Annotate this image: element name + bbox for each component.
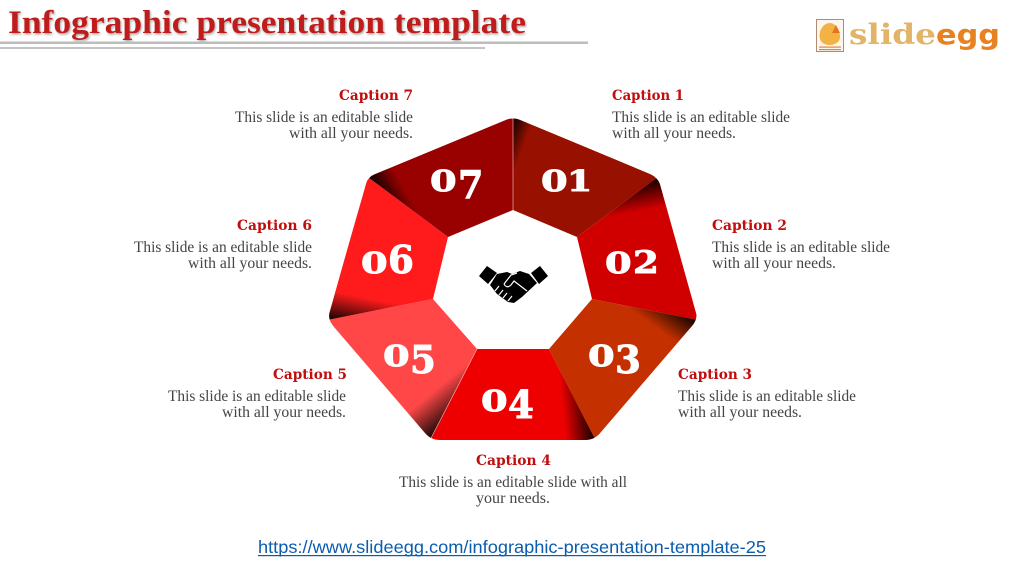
- number 03: 3: [615, 338, 641, 382]
- caption 2: This slide is an editable slide: [712, 239, 890, 256]
- caption 5: [168, 367, 347, 421]
- caption 4: Caption 4: [476, 453, 551, 469]
- caption 6: with all your needs.: [188, 255, 312, 272]
- title: Infographic presentation template: [8, 5, 526, 41]
- number 04: [481, 383, 534, 427]
- caption 3: [678, 367, 856, 421]
- caption 7: with all your needs.: [289, 125, 413, 142]
- number 06: 6: [388, 238, 414, 282]
- caption 3: with all your needs.: [678, 404, 802, 421]
- icon: egg logo mark: [816, 20, 844, 52]
- number 06: [361, 238, 414, 282]
- caption 4: [399, 453, 628, 507]
- segment 05: [327, 299, 477, 441]
- number 07: [430, 162, 483, 207]
- caption 1: with all your needs.: [612, 125, 736, 142]
- heptagon diagram: [327, 117, 698, 441]
- logo: slideegg: egg: [936, 18, 1000, 51]
- caption 4: your needs.: [476, 490, 550, 507]
- logo: slideegg: [816, 18, 1000, 52]
- caption 2: with all your needs.: [712, 255, 836, 272]
- segment 03: [549, 299, 698, 441]
- caption 4: This slide is an editable slide with all: [399, 474, 628, 491]
- caption 2: Caption 2: [712, 218, 787, 234]
- number 01: [541, 164, 592, 199]
- segment 06: [327, 177, 448, 320]
- caption 1: This slide is an editable slide: [612, 109, 790, 126]
- number 03: 0: [588, 340, 615, 374]
- logo: slideegg: slide: [849, 18, 936, 51]
- caption 6: [134, 218, 312, 272]
- number 04: 0: [481, 385, 508, 419]
- number 03: [588, 338, 641, 382]
- segment 02: [577, 177, 698, 320]
- caption 6: Caption 6: [237, 218, 312, 234]
- number 05: 0: [383, 340, 410, 374]
- caption 7: This slide is an editable slide: [235, 109, 413, 126]
- number 04: 4: [508, 383, 534, 427]
- segment 04: [430, 349, 596, 441]
- number 01: 1: [567, 164, 592, 198]
- caption 2: [712, 218, 890, 272]
- number 05: 5: [410, 338, 436, 382]
- icon: handshake: [479, 266, 548, 303]
- number 02: [605, 245, 659, 281]
- number 02: 0: [605, 247, 632, 281]
- segment 07: [368, 117, 513, 237]
- caption 5: with all your needs.: [222, 404, 346, 421]
- caption 3: Caption 3: [678, 367, 752, 383]
- segment 01: [513, 117, 658, 237]
- number 07: 0: [430, 165, 457, 199]
- number 05: [383, 338, 436, 382]
- source link: https://www.slideegg.com/infographic-presentation-template-25: [258, 537, 766, 557]
- caption 5: Caption 5: [273, 367, 347, 383]
- caption 7: [235, 88, 413, 142]
- caption 1: [612, 88, 790, 142]
- number 01: 0: [541, 165, 568, 199]
- number 07: 7: [458, 162, 483, 207]
- caption 7: Caption 7: [339, 88, 413, 104]
- caption 3: This slide is an editable slide: [678, 388, 856, 405]
- caption 1: Caption 1: [612, 88, 684, 104]
- caption 6: This slide is an editable slide: [134, 239, 312, 256]
- caption 5: This slide is an editable slide: [168, 388, 346, 405]
- number 02: 2: [633, 245, 659, 281]
- number 06: 0: [361, 247, 388, 281]
